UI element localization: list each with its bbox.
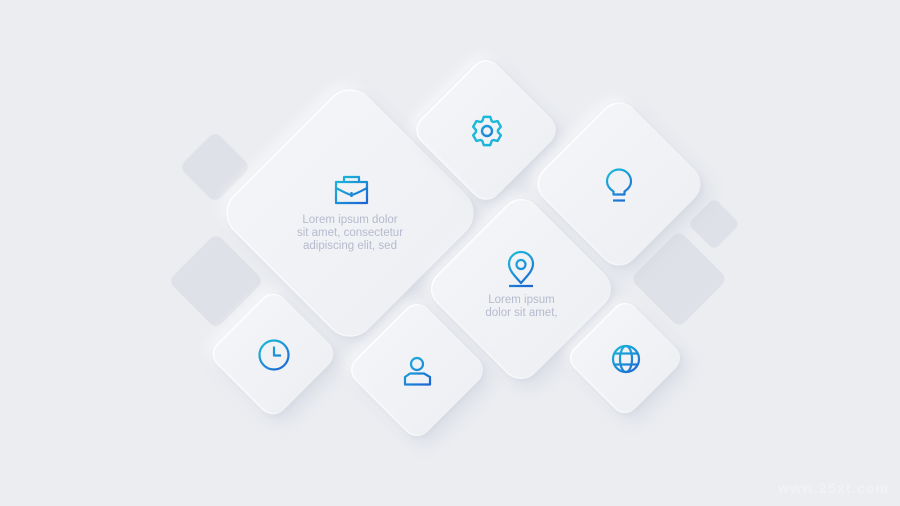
icon: clock xyxy=(258,339,290,371)
icon: gear xyxy=(472,116,502,146)
grey diamond: upper left xyxy=(182,134,248,200)
panel: gear card xyxy=(416,60,562,206)
icon: location pin xyxy=(508,250,534,288)
panel: clock card xyxy=(212,294,339,420)
panel: globe card xyxy=(566,301,686,418)
panel: location pin card xyxy=(428,196,617,385)
watermark: www.25xt.com xyxy=(778,480,889,496)
grey diamond: small right xyxy=(690,200,738,248)
grey diamond: lower left xyxy=(172,236,260,326)
panel: light bulb card xyxy=(536,102,706,272)
text block: location description xyxy=(485,294,558,318)
icon: globe xyxy=(612,344,640,374)
text block: briefcase description xyxy=(297,214,403,252)
icon: briefcase xyxy=(334,176,368,204)
text block: briefcase description: sit amet, consectetur xyxy=(297,226,403,238)
text block: location description: dolor sit amet, xyxy=(485,306,558,318)
icon: light bulb xyxy=(606,168,632,202)
grey diamond: lower right xyxy=(634,234,724,324)
text block: location description: Lorem ipsum xyxy=(488,294,555,306)
panel: person card xyxy=(351,302,488,442)
icon: person xyxy=(404,356,432,386)
text block: briefcase description: Lorem ipsum dolor xyxy=(302,214,398,226)
text block: briefcase description: adipiscing elit, sed xyxy=(303,240,397,252)
panel: large briefcase card xyxy=(226,90,480,342)
